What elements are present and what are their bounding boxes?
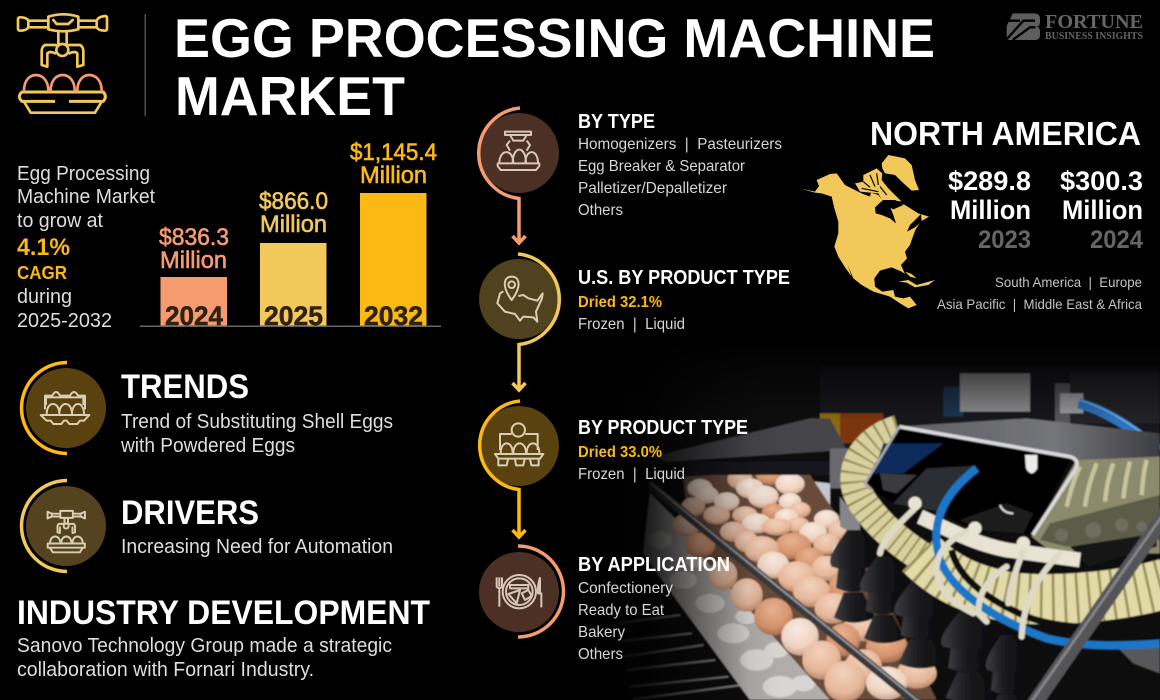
CAGR text block: 4.1% bbox=[17, 234, 70, 261]
front ribbed hose bbox=[920, 553, 1160, 599]
background machinery bbox=[653, 367, 1160, 700]
bar 2025: Million bbox=[260, 211, 327, 238]
segment: by application: Confectionery bbox=[578, 580, 673, 597]
segment: U.S. by product type: U.S. BY PRODUCT TYPE bbox=[578, 267, 790, 289]
bar 2024: Million bbox=[160, 247, 227, 274]
panel: industry development bbox=[17, 594, 430, 681]
panel: drivers bbox=[22, 480, 393, 572]
rear hose and side plate bbox=[1032, 455, 1160, 553]
conveyor and eggs bbox=[617, 465, 937, 700]
CAGR text block bbox=[17, 163, 155, 332]
bar 2032: 2032 bbox=[364, 301, 423, 331]
map of North America bbox=[800, 155, 935, 308]
segment: by type: BY TYPE bbox=[578, 111, 655, 133]
segment: by type: Egg Breaker & Separator bbox=[578, 158, 746, 175]
zip ties bbox=[880, 505, 1060, 637]
segment: U.S. by product type bbox=[479, 254, 790, 390]
segment: by application: Others bbox=[578, 646, 623, 663]
CAGR text block: to grow at bbox=[17, 210, 103, 232]
title: EGG PROCESSING MACHINE bbox=[174, 7, 935, 69]
segment: by product type: Dried 33.0% bbox=[578, 444, 662, 461]
panel: North America bbox=[800, 115, 1143, 312]
value 2024: Million bbox=[1062, 195, 1143, 225]
other regions: South America | Europe bbox=[995, 274, 1142, 290]
drivers icon bbox=[22, 480, 106, 572]
U.S. map icon with arc and arrow bbox=[479, 254, 559, 390]
CAGR text block: CAGR bbox=[17, 263, 67, 283]
CAGR text block: during bbox=[17, 286, 72, 308]
segment: U.S. by product type: Dried 32.1% bbox=[578, 294, 662, 311]
rail bbox=[650, 485, 930, 700]
egg rows bbox=[673, 465, 937, 700]
value 2023: $289.8 bbox=[948, 166, 1031, 196]
segment: by type: Others bbox=[578, 202, 623, 219]
bar 2025 bbox=[259, 188, 328, 331]
CAGR text block: Machine Market bbox=[17, 186, 155, 208]
title: MARKET bbox=[175, 65, 405, 127]
bar 2024: $836.3 bbox=[159, 224, 229, 251]
segment: by application bbox=[479, 546, 730, 663]
segment: by type bbox=[479, 108, 782, 243]
panel: drivers: DRIVERS bbox=[121, 494, 259, 532]
segment: U.S. by product type: Frozen | Liquid bbox=[578, 316, 685, 333]
value 2023 bbox=[948, 166, 1031, 254]
heading: NORTH AMERICA bbox=[870, 115, 1141, 152]
bar 2032 bbox=[350, 139, 437, 331]
panel: trends: TRENDS bbox=[121, 368, 249, 406]
bar 2025: $866.0 bbox=[259, 188, 328, 215]
other regions bbox=[937, 274, 1142, 312]
value 2024: $300.3 bbox=[1060, 166, 1143, 196]
white bundle bbox=[920, 517, 1080, 560]
left ribbed hose bbox=[855, 430, 927, 560]
panel: drivers: Increasing Need for Automation bbox=[121, 536, 393, 558]
segment: by product type: Frozen | Liquid bbox=[578, 466, 685, 483]
photo: egg conveyor with robotic gripper bbox=[560, 340, 1160, 700]
header divider bbox=[144, 14, 146, 116]
trends icon bbox=[22, 362, 106, 454]
other regions: Asia Pacific | Middle East & Africa bbox=[937, 296, 1142, 312]
CAGR text block: 2025-2032 bbox=[17, 310, 112, 332]
CAGR text block: Egg Processing bbox=[17, 163, 150, 185]
gripper plate bbox=[898, 418, 1160, 460]
bar 2032: Million bbox=[360, 162, 427, 189]
logo: Fortune Business Insights bbox=[1007, 11, 1143, 42]
suction cups bbox=[830, 530, 875, 623]
carton icon with arc and arrow bbox=[479, 401, 559, 537]
plate icon with arc bbox=[479, 546, 564, 637]
bar 2032: $1,145.4 bbox=[350, 139, 437, 166]
panel: industry development: INDUSTRY DEVELOPMENT bbox=[17, 594, 430, 632]
segment: by product type: BY PRODUCT TYPE bbox=[578, 417, 748, 439]
value 2024: 2024 bbox=[1090, 226, 1143, 254]
header icon: robotic arm and egg tray bbox=[18, 14, 107, 113]
segment: by type: Palletizer/Depalletizer bbox=[578, 180, 728, 197]
value 2023: Million bbox=[950, 195, 1031, 225]
segment: by product type bbox=[479, 401, 748, 537]
logo: Fortune Business Insights: BUSINESS INSIGHTS bbox=[1045, 31, 1143, 42]
bar 2024 bbox=[159, 224, 229, 331]
segment: by type: Homogenizers | Pasteurizers bbox=[578, 136, 782, 153]
panel: industry development: Sanovo Technology Group made a strategic bbox=[17, 635, 392, 657]
panel: trends bbox=[22, 362, 393, 457]
blue loop tube bbox=[952, 550, 1160, 628]
segment: by application: Ready to Eat bbox=[578, 602, 665, 619]
logo: Fortune Business Insights: FORTUNE bbox=[1045, 11, 1143, 33]
by type icon with arc and arrow bbox=[479, 108, 559, 243]
value 2024 bbox=[1060, 166, 1143, 254]
bar 2024: 2024 bbox=[165, 301, 223, 331]
panel: trends: Trend of Substituting Shell Eggs bbox=[121, 411, 393, 433]
bar chart: market size bbox=[140, 139, 441, 331]
title bbox=[174, 7, 935, 127]
value 2023: 2023 bbox=[978, 226, 1031, 254]
segment: by application: Bakery bbox=[578, 624, 625, 641]
bar 2025: 2025 bbox=[264, 301, 323, 331]
panel: trends: with Powdered Eggs bbox=[120, 435, 295, 457]
foreground rod bbox=[1030, 503, 1160, 700]
panel: industry development: collaboration with Fornari Industry. bbox=[17, 659, 314, 681]
segment: by application: BY APPLICATION bbox=[578, 554, 730, 576]
